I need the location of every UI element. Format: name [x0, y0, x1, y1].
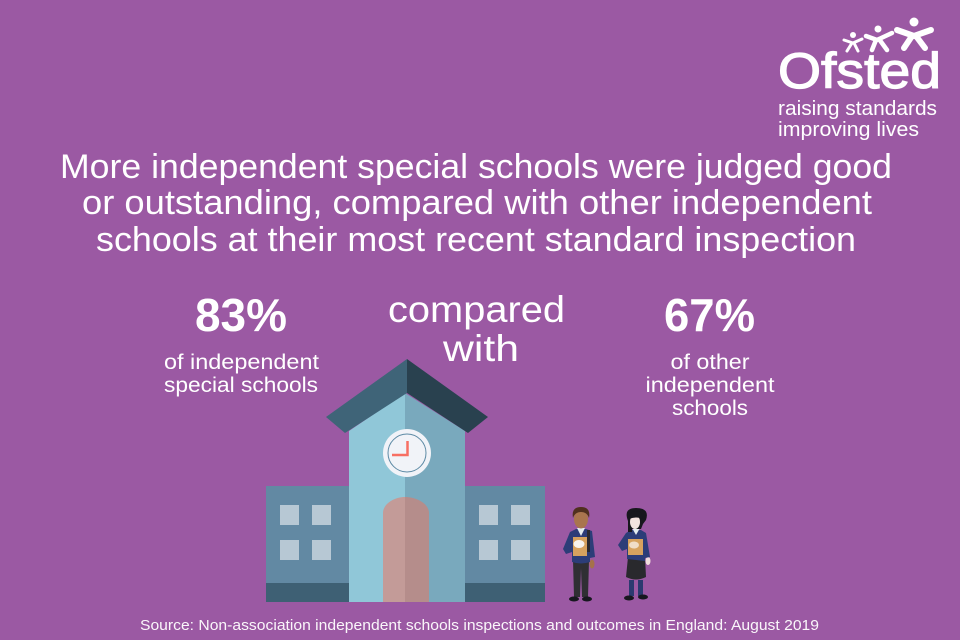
trousers [573, 560, 589, 597]
icon: girl pupil [618, 508, 650, 600]
title: More independent special schools were judged good [60, 148, 892, 186]
icon: three figures [844, 18, 931, 51]
hand [590, 560, 594, 568]
book [628, 539, 643, 555]
source note: Source: Non-association independent schools inspections and outcomes in England: August 2019 [140, 617, 819, 634]
label: other independent schools: schools [672, 397, 748, 420]
text: compared with: compared [388, 289, 565, 330]
shirt [577, 528, 585, 536]
bag strap [587, 530, 590, 552]
logo: Ofsted [778, 18, 941, 141]
statistic: 83%: 83% [195, 289, 287, 341]
icon: boy pupil [563, 507, 595, 602]
hand [646, 557, 650, 565]
book [573, 537, 587, 556]
statistic: 67%: 67% [664, 289, 755, 341]
roof [326, 359, 407, 433]
title: or outstanding, compared with other independent [82, 184, 873, 222]
tower [349, 393, 405, 602]
label: independent special schools: special schools [164, 374, 318, 397]
strapline: raising standards [778, 98, 937, 120]
text: compared with: with [442, 328, 519, 369]
label: independent special schools [164, 351, 319, 397]
title [60, 148, 892, 259]
skirt [626, 557, 646, 580]
title: schools at their most recent standard inspection [96, 221, 856, 259]
label: other independent schools: independent [646, 374, 775, 397]
socks [629, 580, 634, 596]
left wing [266, 486, 349, 602]
door [383, 497, 405, 602]
wordmark: Ofsted [778, 43, 941, 99]
clock [383, 429, 431, 477]
label: other independent schools [646, 351, 775, 420]
text: compared with [388, 289, 565, 369]
head [574, 510, 588, 528]
label: independent special schools: of independent [164, 351, 319, 374]
strapline second line: improving lives [778, 119, 919, 141]
shirt [632, 528, 640, 535]
label: other independent schools: of other [670, 351, 750, 374]
blazer [563, 529, 595, 564]
right wing [465, 486, 545, 602]
blazer [618, 530, 650, 561]
hair and face [627, 508, 647, 532]
icon: school building [266, 359, 545, 602]
windows [280, 505, 530, 560]
